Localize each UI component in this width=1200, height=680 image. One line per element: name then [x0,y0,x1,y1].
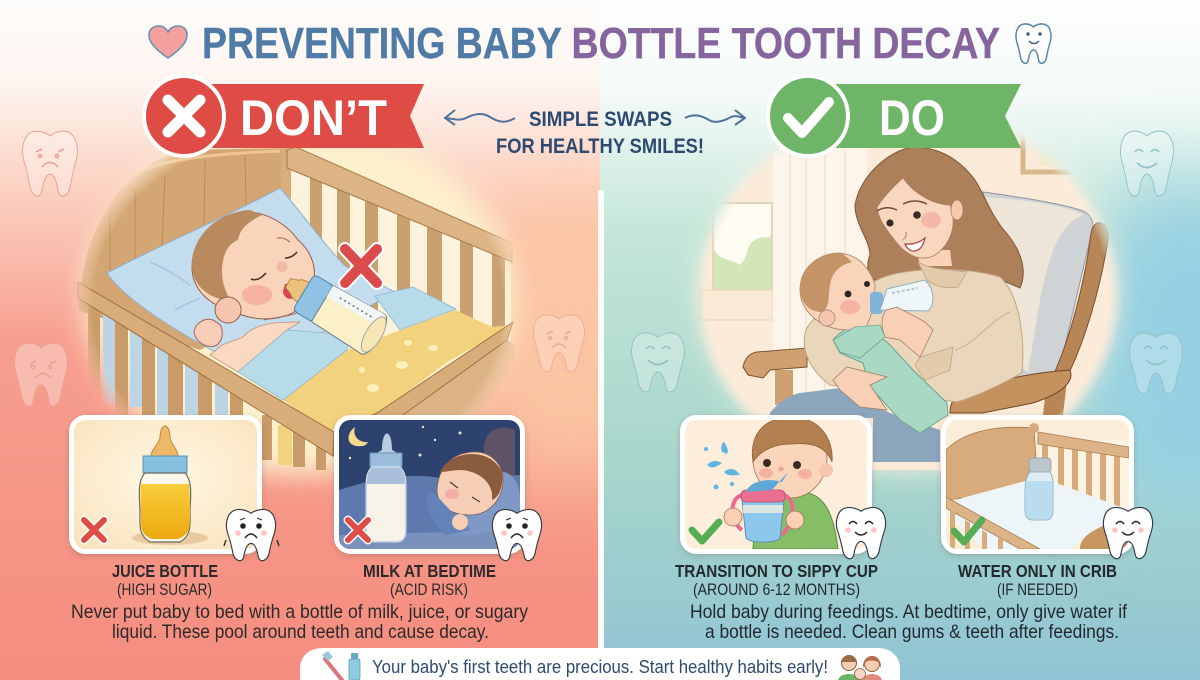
blanket [339,475,520,549]
pillow [107,188,395,352]
background: don't side [0,0,690,680]
splash [704,442,740,490]
blue sheet behind bottle [375,287,456,330]
x badge [144,76,224,156]
card: water only in crib [944,418,1153,559]
hands on bottle [882,307,933,357]
x mark [84,520,104,540]
icon: smiling tooth [1016,24,1051,63]
background: do side [600,0,1200,680]
sippy cup label: TRANSITION TO SIPPY CUP [675,561,878,581]
juice bottle label: JUICE BOTTLE [112,561,218,581]
feeding bottle [870,280,933,314]
baby's head [800,253,875,330]
headboard [78,148,295,350]
faint happy tooth mid right [1130,333,1182,394]
swaps callout [445,108,745,158]
sippy cup [724,472,804,542]
arrow right [685,110,745,125]
faint sad tooth right of crib [533,315,585,372]
icon: heart [149,26,187,58]
pillow [460,471,520,535]
x mark on illustration [345,249,377,283]
check mark [692,522,719,541]
card: milk at bedtime [336,418,542,561]
armchair [983,192,1093,390]
milk at bedtime label: MILK AT BEDTIME [363,561,496,581]
do description line 2: a bottle is needed. Clean gums & teeth after feedings. [705,621,1119,643]
do description line 1: Hold baby during feedings. At bedtime, only give water if [690,601,1128,623]
title text: PREVENTING BABY BOTTLE TOOTH DECAY [202,19,1000,68]
faint sad tooth top left [23,131,77,196]
icon: milk bottle [366,434,406,542]
do banner [768,76,1021,156]
front rail [78,282,334,456]
mother's leg [770,388,940,462]
footer text: Your baby's first teeth are precious. Start healthy habits early! [372,657,828,677]
baby's shoulder and arm [210,322,300,372]
swaps text line 1: SIMPLE SWAPS [529,108,672,131]
moon and stars [349,427,368,446]
toddler [752,418,838,549]
ribbon [830,84,1021,148]
sleeping baby [427,452,503,535]
baby's arm [833,325,885,358]
icon: juice bottle [139,426,191,542]
sad tooth [224,509,279,561]
faint background teeth [15,131,1182,406]
card: juice bottle [72,418,279,561]
bottle [285,276,388,355]
crib illustration: baby sleeping with bottle [78,125,515,475]
check mark [954,520,982,542]
front slats and windows [103,314,228,415]
footer tip pill [300,648,900,680]
water sublabel: (IF NEEDED) [997,581,1078,599]
head [192,212,314,319]
mother feeding baby illustration [690,120,1130,470]
yellow blanket [283,310,513,434]
back slats [290,165,511,345]
mother's hair [855,147,1023,288]
fist [194,319,222,347]
mother's sweater [804,269,1023,402]
don't text: DON’T [240,90,387,146]
x mark [348,520,368,540]
hair [192,210,262,302]
curtain [773,140,867,420]
card: sippy cup [682,418,886,559]
don't description line 2: liquid. These pool around teeth and cause decay. [112,621,489,643]
water label: WATER ONLY IN CRIB [958,561,1117,581]
do text: DO [879,90,945,146]
sad tooth [492,509,542,561]
blue blanket [238,330,350,400]
wall and window [690,130,1130,470]
faint happy tooth left of do panel [632,333,684,392]
water jar [1025,458,1053,520]
icon: family [838,656,882,680]
mother's hand under baby [833,367,887,410]
juice bottle sublabel: (HIGH SUGAR) [117,581,212,599]
do captions [675,561,1128,643]
mother's face [877,178,953,258]
far wood panel [404,340,515,415]
happy tooth [836,507,886,559]
baby's body [833,327,948,433]
don't description line 1: Never put baby to bed with a bottle of milk, juice, or sugary [71,601,528,623]
check badge [768,76,848,156]
picture frame [1020,135,1072,174]
don't banner [144,76,424,156]
milk sublabel: (ACID RISK) [390,581,468,599]
icon: toothbrush and toothpaste [322,651,360,680]
happy tooth [1103,507,1153,559]
crib [946,423,1130,550]
arrow left [445,110,515,125]
sippy cup sublabel: (AROUND 6-12 MONTHS) [693,581,860,599]
faint sad tooth mid left [15,343,67,406]
title [149,19,1051,68]
back rail [287,147,512,262]
swaps text line 2: FOR HEALTHY SMILES! [496,135,704,158]
faint happy tooth top right [1121,131,1173,196]
don't captions [71,561,528,643]
ribbon [205,84,424,148]
